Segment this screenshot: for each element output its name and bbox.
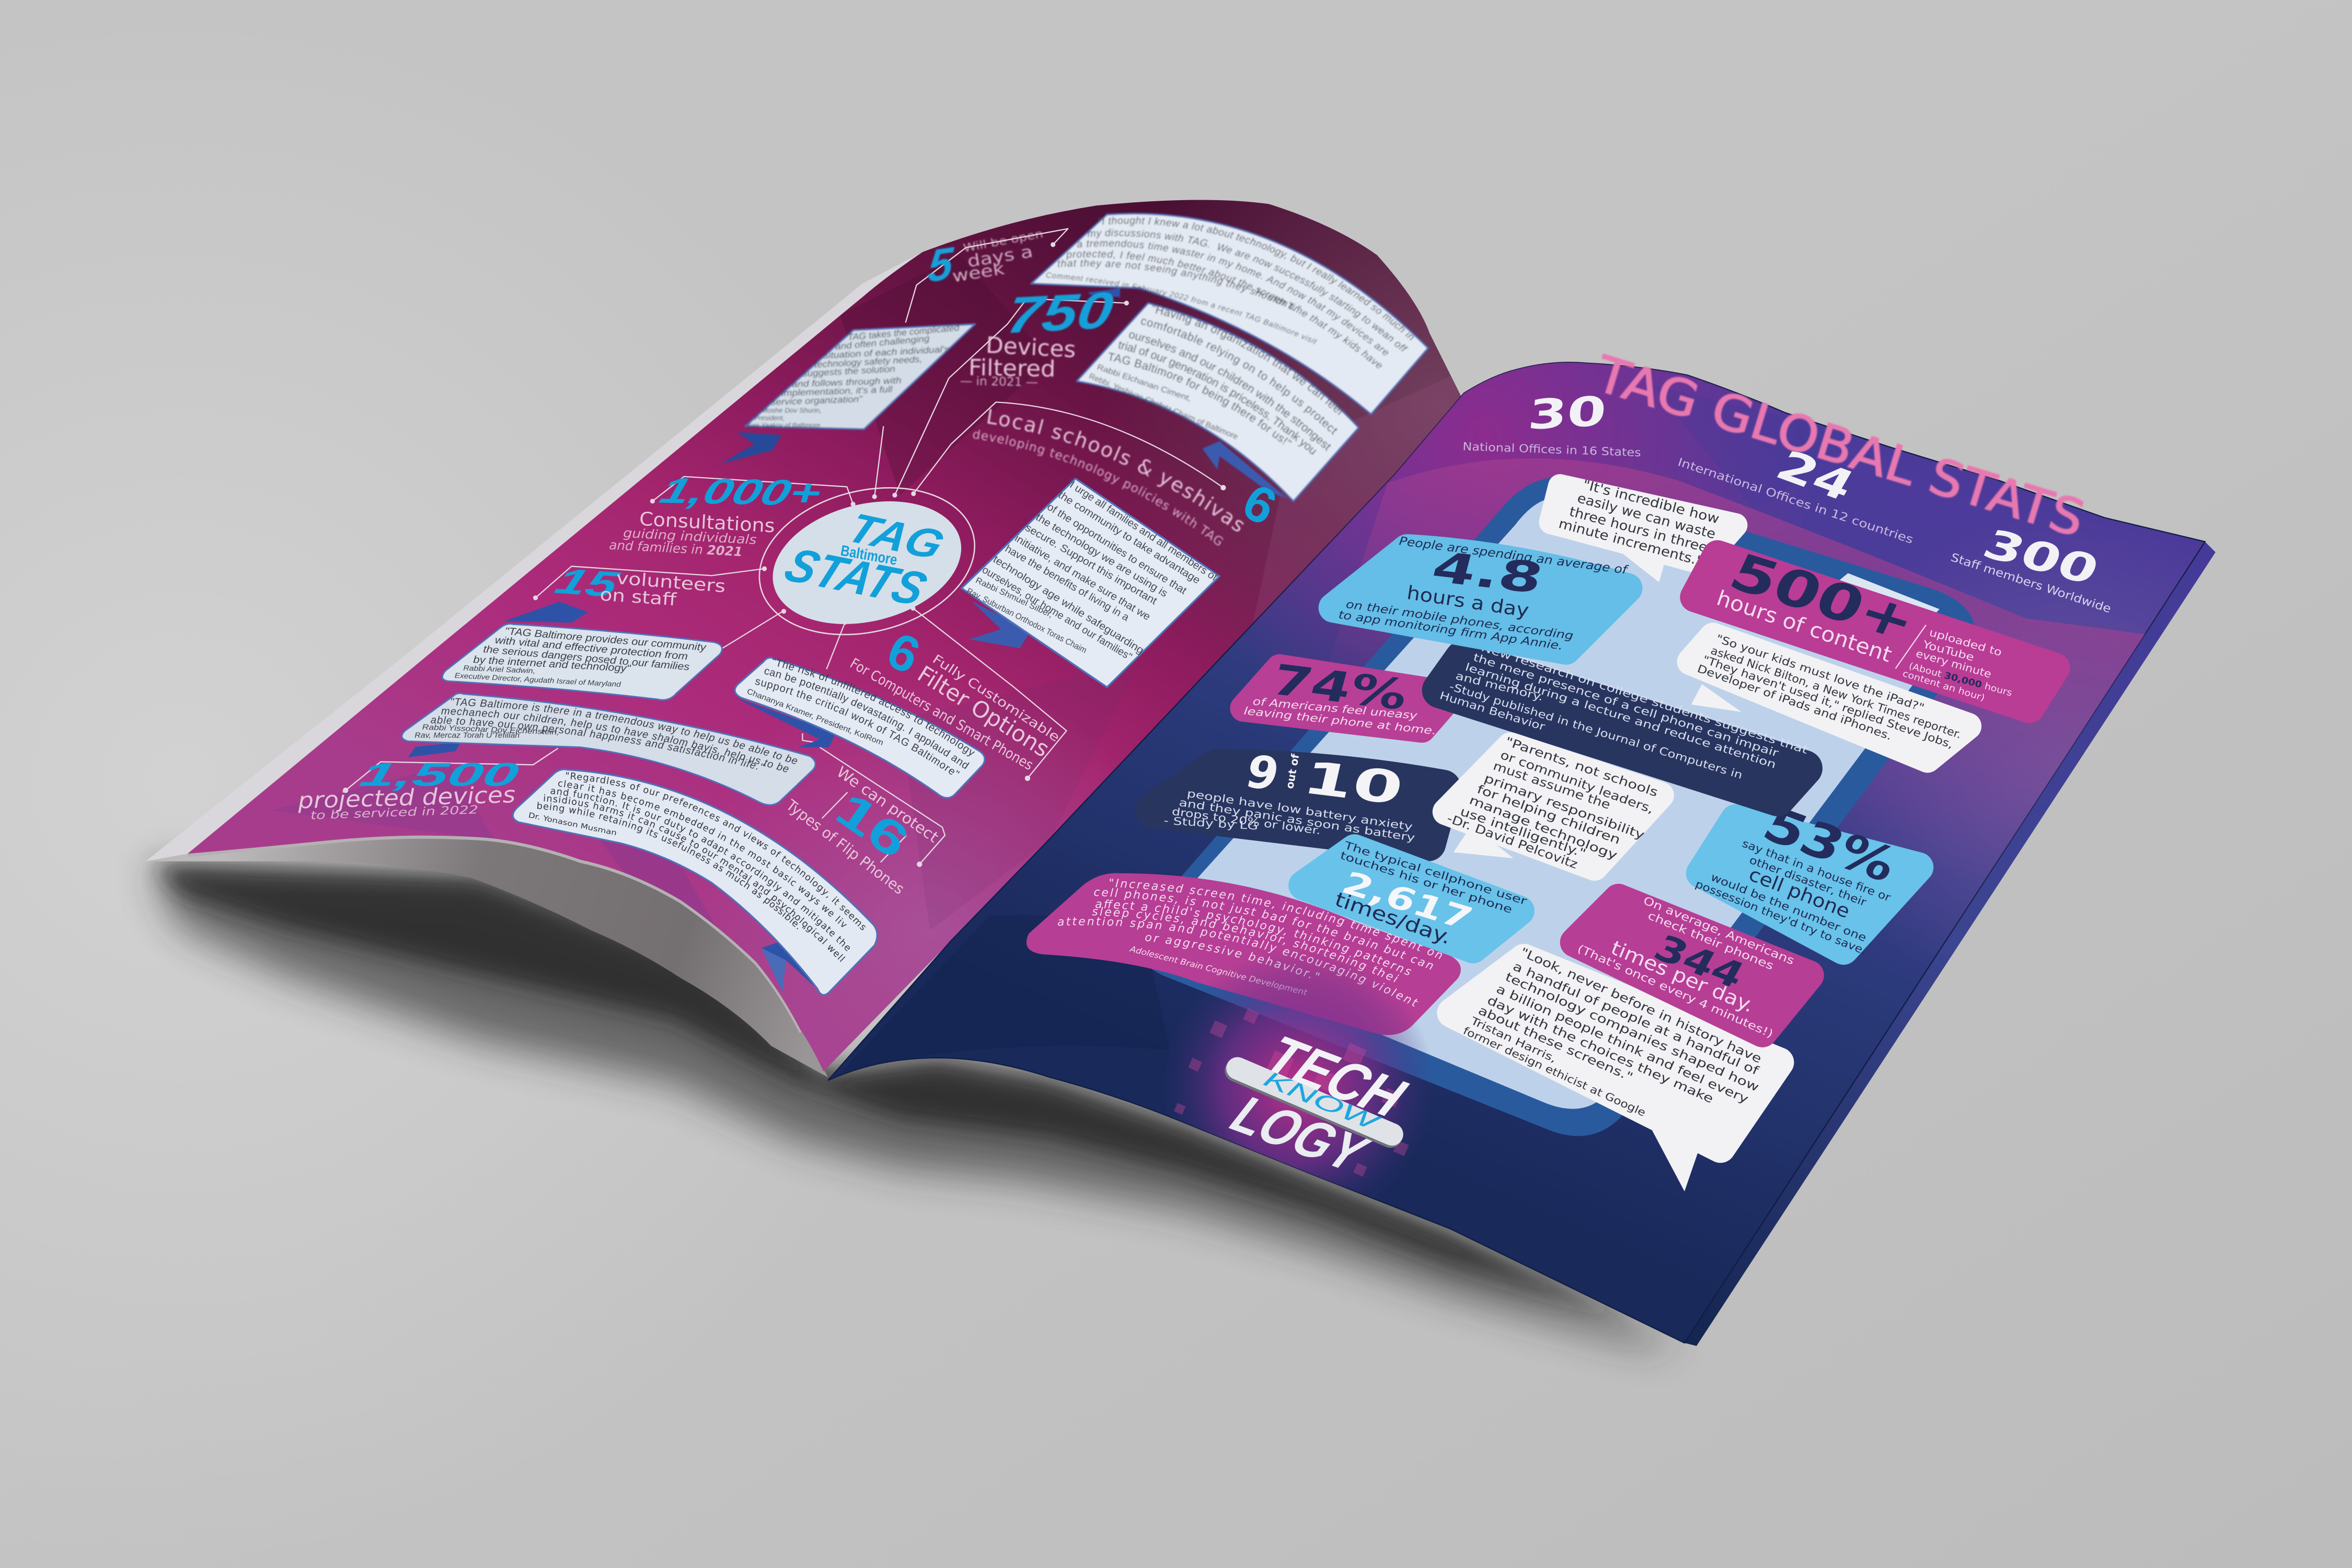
stat: 16 types of flip phones: Types of Flip Phones: [782, 795, 908, 898]
quote bubble: TAG Baltimore is there: Rabbi Yissochar Dov Eichenstein,: [422, 723, 559, 737]
quote bubble: So your kids must love the iPad: [1690, 632, 1968, 759]
quote bubble: Having an organization: comfortable relying on to help us protect: [1139, 314, 1340, 437]
quote bubble: TAG Baltimore provides: the serious dangers posed to our families: [483, 643, 690, 673]
callout: 2,617 times per day: 2,617: [1336, 865, 1478, 937]
quote bubble: Parents, not schools: [1445, 735, 1661, 872]
callout: new research on college students: and memory.: [1455, 670, 1544, 704]
quote bubble: It's incredible how easily: minute increments.": [1557, 516, 1704, 569]
panel: right page TAG Global Stats: [827, 353, 2206, 1344]
quote bubble: I thought I knew a lot about technology: "I thought I knew a lot about technology, but I really learned so much in: [1098, 216, 1414, 341]
quote bubble: So your kids must love the iPad: "They haven't used it," replied Steve Jobs,: [1701, 653, 1955, 751]
logo: Tech Know Logy: LOGY: [1218, 1087, 1381, 1182]
callout: 53 percent: other disaster, their: [1748, 854, 1869, 909]
quote bubble: I urge all families: the technology we are using is: [1034, 512, 1169, 599]
quote bubble: TAG Baltimore is there: Rav, Mercaz Torah U'Tefillah: [414, 732, 520, 740]
stat: 30 national offices: 30: [1526, 388, 1608, 439]
quote bubble: TAG takes the complicated: Bais Yaakov of Baltimore: [747, 422, 820, 429]
quote bubble: Having an organization: Rabbi Elchanan Ciment,: [1096, 363, 1192, 403]
quote bubble: Regardless of our preferences: insidious harms it can cause to our mental and psychological well: [543, 793, 847, 964]
stat: 1,000+ consultations: Consultations: [639, 509, 776, 537]
callout: 9 out of 10: people have low battery anxiety: [1186, 787, 1413, 833]
quote bubble: TAG Baltimore provides: with vital and effective protection from: [494, 635, 688, 662]
quote bubble: Regardless of our preferences: and function. It is our duty to adapt accordingly and mitigate the: [550, 786, 854, 954]
stat: 6 local schools and yeshivas: Local schools & yeshivas: [985, 405, 1250, 537]
callout: 500+ hours of content: uploaded to: [1928, 626, 2003, 659]
callout: 4.8 hours a day: on their mobile phones, according: [1345, 598, 1574, 643]
magazine mockup: open booklet on grey surface: [0, 200, 2216, 1378]
stat: 5 days a week: days a: [966, 243, 1034, 271]
quote bubble: I urge all families: of the opportunities to ensure that: [1045, 501, 1189, 597]
callout: new research on college students: -Study published in the Journal of Computers in: [1448, 680, 1744, 781]
callout: 53 percent: would be the number one: [1709, 871, 1869, 944]
stat: 16 types of flip phones: [782, 763, 942, 898]
logo: Tech Know Logy: [1174, 954, 1427, 1195]
quote bubble: TAG takes the complicated: and follows through with: [792, 375, 902, 389]
callout: 2,617 times per day: The typical cellphone user: [1342, 838, 1529, 907]
callout: 344 times per day: On average, Americans: [1641, 894, 1796, 967]
quote bubble: I thought I knew a lot about technology: that they are not seeing anything they shouldn't.": [1057, 258, 1302, 315]
stat: 6 fully customizable filter options: 6: [879, 621, 928, 685]
quote bubble: The risk of unfiltered access: Chananya Kramer, President, KolRom: [746, 687, 885, 747]
callout: 500+ hours of content: every minute: [1915, 647, 1993, 681]
quote bubble: I urge all families: Rabbi Shmuel Silber,: [974, 575, 1054, 619]
left page underside paper block: [145, 836, 828, 1077]
quote bubble: Regardless of our preferences: "Regardless of our preferences and views of technology, it seems: [564, 770, 869, 933]
stat: 6 fully customizable filter options: Filter Options: [913, 661, 1054, 763]
quote bubble: It's incredible how easily: easily we can waste: [1576, 490, 1717, 542]
stat: 1,000+ consultations: [609, 470, 826, 559]
quote bubble: I thought I knew a lot about technology: protected, I feel much better about the screen time that my kids have: [1066, 250, 1382, 369]
quote bubble: It's incredible how easily: "It's incredible how: [1581, 477, 1721, 527]
stat: 5 days a week: Will be open: [962, 227, 1044, 255]
quote bubble: I urge all families: have the benefits of living in a: [1003, 543, 1132, 624]
callout: 500+ hours of content: 500+: [1721, 543, 1925, 652]
quote bubble: Look, never before in history: a handful of people at a handful of: [1511, 960, 1761, 1078]
right page block thickness: [1685, 541, 2216, 1346]
callout: 344 times per day: check their phones: [1646, 909, 1775, 973]
stat: 6 local schools and yeshivas: 6: [1234, 472, 1286, 536]
quote bubble: Parents, not schools: must assume the: [1491, 759, 1612, 812]
quote bubble: Look, never before in history: Tristan Harris,: [1468, 1014, 1559, 1065]
quote bubble: It's incredible how easily: [1551, 477, 1735, 582]
quote bubble: I urge all families: [962, 477, 1219, 687]
callout: 344 times per day: [1575, 894, 1809, 1041]
title: TAG Global Stats: TAG GLOBAL STATS: [1589, 345, 2091, 548]
stat: 15 volunteers on staff: [550, 561, 727, 610]
quote bubble: TAG takes the complicated: implementation, it's a full: [781, 384, 893, 398]
quote bubble: Look, never before in history: [1452, 946, 1779, 1191]
callout: 4.8 hours a day: People are spending an average of: [1398, 534, 1630, 577]
quote bubble: I urge all families: technology age while safeguarding: [991, 554, 1146, 656]
stat: 750 devices filtered: 750: [1004, 281, 1117, 344]
stat: 1,500 projected devices: to be serviced in 2022: [310, 803, 479, 822]
stat: 750 devices filtered: Devices: [985, 332, 1077, 363]
callout: 9 out of 10: [1154, 746, 1443, 844]
quote bubble: Parents, not schools: primary responsibility: [1482, 771, 1646, 843]
connector lines around the central badge: [345, 229, 1223, 864]
icon: phone outline behind bubbles: [1136, 477, 1976, 1136]
stat: 6 fully customizable filter options: Fully Customizable: [930, 651, 1063, 745]
callout: 9 out of 10: out of: [1283, 753, 1301, 790]
quote: increased screen time: "Increased screen time, including time spent on: [1109, 877, 1445, 963]
quote bubble: The risk of unfiltered access: [734, 656, 985, 798]
quote bubble: I thought I knew a lot about technology: my discussions with TAG. We are now successfully starting to wean off: [1087, 228, 1409, 352]
callout: 4.8 hours a day: 4.8: [1427, 543, 1548, 603]
stat: 5 days a week: week: [951, 259, 1006, 286]
quote: increased screen time: Adolescent Brain Cognitive Development: [1128, 944, 1309, 998]
callout: 2,617 times per day: times/day.: [1332, 887, 1455, 949]
logo: Tech Know Logy: KNOW: [1256, 1068, 1387, 1134]
callout: 9 out of 10: and they panic as soon as battery: [1178, 796, 1416, 844]
quote: increased screen time: affect a child's psychology, thinking patterns,: [0, 0, 1413, 979]
callout: 53 percent: [1693, 797, 1919, 957]
stat: 750 devices filtered: Filtered: [969, 355, 1056, 383]
quote bubble: TAG takes the complicated: Moshe Dov Shurin,: [762, 407, 822, 414]
stat: 1,500 projected devices: 1,500: [356, 756, 522, 793]
callout: 2,617 times per day: [1304, 838, 1529, 949]
quote bubble: Look, never before in history: a billion people think and feel every: [1494, 982, 1750, 1106]
stat: 750 devices filtered: — in 2021 —: [960, 374, 1038, 389]
quote bubble: Regardless of our preferences: clear it has become embedded in the most basic ways we live: [0, 0, 849, 930]
stat: 5 days a week: [926, 227, 1044, 292]
quote bubble: I urge all families: ourselves, our home and our families": [980, 564, 1134, 663]
quote bubble: Parents, not schools: manage technology: [1467, 793, 1619, 862]
central badge: TAG Baltimore Stats: [744, 466, 990, 656]
quote bubble: TAG takes the complicated: President,: [755, 414, 785, 422]
quote bubble: So your kids must love the iPad: "So your kids must love the iPad?": [1714, 632, 1926, 714]
quote: increased screen time: cell phones, is not just bad for the brain but can: [1093, 886, 1435, 973]
callout: 9 out of 10: 9: [1241, 746, 1284, 801]
quote bubble: Having an organization: TAG Baltimore for being there for us!": [1106, 350, 1294, 450]
stat: 1,000+ consultations: and families in 2021: [609, 537, 743, 559]
callout: 500+ hours of content: hours of content: [1714, 586, 1895, 667]
quote bubble: TAG takes the complicated: suggests the solution: [802, 363, 895, 379]
quote: increased screen time: sleep cycles, and behavior, shortening their: [0, 0, 1400, 986]
stat: 24 international offices: [1676, 442, 1915, 547]
stat: 300 staff members: [1949, 521, 2113, 616]
quote bubble: Having an organization: "Having an organization that we can feel: [1150, 302, 1346, 418]
callout: 53 percent: say that in a house fire or: [1740, 837, 1893, 904]
stat: 16 types of flip phones: 16: [826, 782, 918, 869]
quote bubble: So your kids must love the iPad: Developer of iPads and iPhones.: [1696, 662, 1894, 743]
stat: 24 international offices: International Offices in 12 countries: [1676, 456, 1915, 547]
stat: 750 devices filtered: [960, 281, 1117, 389]
quote bubble: I urge all families: Rav, Suburban Orthodox Toras Chaim: [965, 586, 1088, 655]
quote bubble: Look, never before in history: "Look, never before in history have: [1518, 946, 1763, 1066]
stat: 15 volunteers on staff: volunteers: [616, 568, 727, 596]
callout: 53 percent: 53%: [1754, 797, 1907, 893]
logo: Tech Know Logy: TECH: [1250, 1026, 1422, 1127]
callout: 500+ hours of content: YouTube: [1921, 638, 1976, 664]
quote bubble: Having an organization: ourselves and our children with the strongest: [1127, 328, 1334, 453]
quote bubble: TAG takes the complicated: "TAG takes the complicated: [844, 322, 961, 343]
callout: 9 out of 10: drops to 20% or lower.: [1171, 805, 1321, 837]
callout: 4.8 hours a day: hours a day: [1405, 582, 1530, 622]
callout: 74 percent: 74%: [1266, 655, 1413, 720]
stat: 1,500 projected devices: [297, 756, 522, 822]
quote bubble: Parents, not schools: -Dr. David Pelcovitz: [1445, 812, 1579, 872]
quote bubble: TAG Baltimore is there: [402, 693, 815, 805]
central badge: TAG Baltimore Stats: TAG: [840, 505, 951, 568]
quote bubble: I urge all families: "I urge all families and all members of: [1065, 477, 1219, 583]
quote bubble: TAG Baltimore is there: able to have our own personal happiness and satisfaction in life.": [430, 714, 765, 774]
quote: increased screen time: or aggressive behavior.": [1144, 931, 1321, 984]
quote bubble: TAG takes the complicated: situation of each individual's: [823, 344, 950, 361]
quote bubble: Parents, not schools: for helping children: [1475, 782, 1622, 847]
quote bubble: TAG Baltimore provides: Rabbi Ariel Sadwin,: [463, 664, 535, 675]
stat: 5 days a week: 5: [926, 237, 955, 292]
callout: 53 percent: possession they'd try to save.: [1693, 878, 1868, 957]
quote bubble: The risk of unfiltered access: "The risk of unfiltered access to technology: [770, 656, 977, 759]
stat: 30 national offices: [1462, 388, 1641, 459]
callout: 9 out of 10: 10: [1298, 752, 1408, 815]
quote: increased screen time: attention span and potentially encouraging violent: [1057, 915, 1420, 1010]
callout: 500+ hours of content: content an hour): [1901, 668, 1986, 704]
left page paper edge: [145, 252, 923, 1032]
stat: 30 national offices: National Offices in 16 States: [1462, 440, 1641, 459]
quote bubble: So your kids must love the iPad: asked Nick Bilton, a New York Times reporter.: [1709, 644, 1963, 741]
quote bubble: TAG takes the complicated: technology safety needs,: [814, 354, 923, 370]
stat: 15 volunteers on staff: on staff: [599, 584, 678, 610]
quote bubble: TAG takes the complicated: and often challenging: [835, 333, 930, 352]
quote bubble: The risk of unfiltered access: can be potentially devastating. I applaud and: [763, 665, 971, 772]
quote bubble: Regardless of our preferences: Dr. Yonason Musman: [527, 811, 617, 837]
stat: 6 fully customizable filter options: For Computers and Smart Phones: [847, 655, 1036, 774]
stat: 1,000+ consultations: guiding individuals: [623, 525, 757, 547]
quote bubble: I urge all families: initiative, and make sure that we: [1012, 533, 1152, 623]
callout: 500+ hours of content: [1695, 543, 2055, 708]
quote bubble: TAG Baltimore provides: "TAG Baltimore provides our community: [504, 626, 707, 653]
quote bubble: TAG Baltimore is there: "TAG Baltimore is there in a tremendous way to help us be able to be: [450, 696, 799, 767]
callout: new research on college students: the mere presence of a cell phone can impair: [1472, 651, 1781, 759]
callout: 4.8 hours a day: [1333, 534, 1630, 653]
quote bubble: Look, never before in history: day with the choices they make: [1485, 994, 1715, 1106]
callout: 53 percent: cell phone: [1746, 864, 1853, 923]
quote bubble: Regardless of our preferences: being while retaining its usefulness as much as possible.": [536, 800, 808, 935]
quote bubble: TAG takes the complicated: service organization": [771, 394, 863, 407]
callout: 344 times per day: (That's once every 4 minutes!): [1575, 942, 1775, 1041]
quote bubble: Having an organization: [1077, 302, 1358, 501]
stat: 1,000+ consultations: 1,000+: [656, 470, 826, 513]
central badge: TAG Baltimore Stats: STATS: [777, 538, 935, 615]
quote bubble: I urge all families: the community to take advantage: [1056, 489, 1202, 586]
quote bubble: I thought I knew a lot about technology: Comment received in February 2022 from a recent TAG Baltimore visit: [1045, 271, 1318, 347]
callout: 4.8 hours a day: to app monitoring firm App Annie.: [1338, 608, 1564, 653]
callout: 74 percent: leaving their phone at home.: [1243, 705, 1437, 737]
stat: 1,500 projected devices: projected devices: [297, 782, 516, 814]
quote bubble: Having an organization: trial of our generation is priceless. Thank you: [1117, 338, 1320, 457]
quote bubble: The risk of unfiltered access: support the critical work of TAG Baltimore": [754, 676, 961, 780]
quote bubble: TAG Baltimore provides: by the internet and technology": [473, 654, 631, 674]
callout: 9 out of 10: - Study by LG: [1163, 814, 1259, 832]
callout: new research on college students: learning during a lecture and reduce attention: [1463, 661, 1778, 771]
quote bubble: Parents, not schools: "Parents, not schools: [1503, 735, 1659, 800]
quote bubble: Parents, not schools: use intelligently.": [1458, 805, 1587, 861]
quote bubble: Parents, not schools: or community leaders,: [1498, 748, 1655, 816]
callout: 2,617 times per day: touches his or her phone: [1339, 849, 1514, 916]
callout: new research on college students: [1438, 641, 1809, 798]
callout: 344 times per day: 344: [1647, 928, 1751, 997]
callout: new research on college students: New research on college students suggests that: [1480, 641, 1809, 756]
stat: 6 local schools and yeshivas: developing technology policies with TAG: [972, 427, 1226, 549]
callout: 500+ hours of content: (About 30,000 hours: [1908, 661, 2013, 699]
quote bubble: TAG Baltimore is there: mechanech our children, help us to have shalom bayis, help us to be: [441, 706, 790, 775]
quote bubble: TAG Baltimore provides: [442, 602, 722, 700]
stat: 300 staff members: Staff members Worldwide: [1949, 551, 2113, 616]
quote bubble: It's incredible how easily: three hours in three: [1567, 504, 1709, 556]
quote bubble: Having an organization: Rebbi, Yeshivas Chofetz Chaim of Baltimore: [1088, 372, 1239, 442]
stat: 16 types of flip phones: We can protect: [834, 763, 942, 846]
quote bubble: I urge all families: secure. Support this important: [1023, 522, 1159, 607]
quote bubble: I thought I knew a lot about technology: a tremendous time waster in my home. And now that my devices are: [1077, 239, 1389, 356]
quote bubble: Look, never before in history: technology companies shaped how: [1503, 970, 1761, 1094]
quote bubble: Look, never before in history: former design ethicist at Google: [1461, 1024, 1648, 1119]
quote bubble: TAG Baltimore provides: Executive Director, Agudath Israel of Maryland: [454, 672, 622, 688]
quote bubble: Look, never before in history: about these screens.": [1476, 1004, 1635, 1085]
stat: 300 staff members: 300: [1976, 521, 2106, 594]
callout: new research on college students: Human Behavior: [1438, 689, 1547, 733]
callout: 74 percent: of Americans feel uneasy: [1252, 695, 1419, 722]
stat: 15 volunteers on staff: 15: [550, 561, 625, 605]
stat: 24 international offices: 24: [1768, 442, 1863, 511]
callout: 74 percent: [1243, 655, 1452, 737]
cast shadows under the booklet: [150, 864, 1680, 1346]
panel: left page TAG Baltimore Stats: [187, 200, 1506, 1116]
central badge: TAG Baltimore Stats: Baltimore: [839, 543, 898, 569]
quote bubble: TAG takes the complicated: [721, 322, 975, 464]
quote bubble: I thought I knew a lot about technology: [1031, 214, 1428, 414]
callout: 344 times per day: times per day.: [1608, 936, 1758, 1017]
